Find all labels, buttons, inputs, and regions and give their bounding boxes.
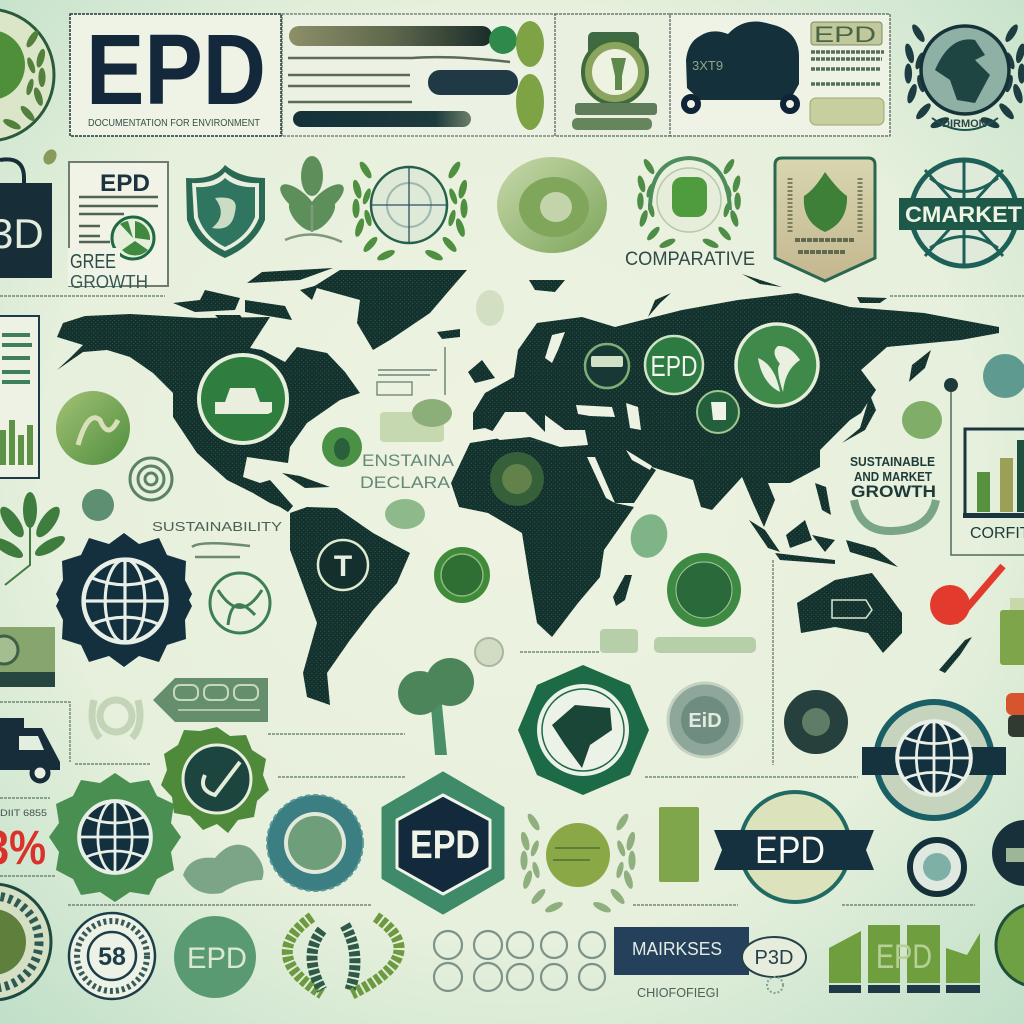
document header: EPD: [100, 170, 150, 197]
inner shield: [196, 178, 255, 247]
stripe: [0, 672, 55, 687]
map badge: europe: [585, 344, 629, 388]
shield emblem: [212, 198, 236, 229]
bar two: [428, 70, 518, 95]
chart base: [829, 985, 980, 993]
icon: small line graphic: [192, 543, 250, 557]
label chips lower map: [600, 629, 756, 653]
icon: bottle: [1000, 598, 1024, 665]
icon grid: [434, 931, 605, 991]
text: sustainable declaration: [360, 451, 455, 492]
map badge: africa: [490, 452, 544, 506]
inner: [537, 684, 629, 776]
center: [0, 909, 26, 975]
chart: green EPD steps: [829, 925, 980, 993]
badge: compass wreath: [351, 160, 469, 263]
pale box: [380, 412, 444, 442]
bottom right circle: [996, 903, 1024, 987]
icon: pin: [944, 378, 1024, 555]
center: [923, 853, 951, 881]
map: seas cutouts: [490, 332, 800, 503]
map: iceland: [437, 329, 460, 339]
truck label: 3XT9: [692, 58, 723, 73]
label: [591, 356, 623, 367]
icon: small dots: [767, 977, 783, 993]
chart label: EPD: [876, 938, 932, 976]
badge: teal gear: [267, 795, 363, 891]
handle: [0, 159, 24, 200]
icon: green blob: [183, 845, 264, 894]
inner: [284, 812, 346, 874]
inner: [676, 562, 732, 618]
icon: red check: [930, 566, 1003, 625]
map badge: australia: [832, 600, 872, 618]
text: comparative: COMPARATIVE: [625, 249, 755, 270]
tick: [955, 566, 1003, 622]
inner ring: [88, 932, 136, 980]
globe: [921, 26, 1009, 114]
check: [203, 762, 240, 795]
wreath ring: [0, 896, 39, 988]
world map: [57, 268, 999, 705]
chart lines: [2, 335, 32, 382]
wreath: [0, 29, 47, 132]
badge: tan shield: [775, 158, 875, 281]
seal: grey ring: [668, 683, 742, 757]
text: caption: CHIOFOFIEGI: [637, 985, 719, 1000]
badge: comparative wreath: [636, 158, 742, 250]
center: [1006, 848, 1024, 862]
inner: [502, 464, 532, 494]
badge: globe banner: [862, 702, 1006, 818]
lines: [553, 848, 600, 860]
label arc: [932, 118, 998, 130]
ring: [542, 689, 624, 771]
icon: double wreath: [287, 917, 399, 994]
icon: shield: [186, 165, 265, 258]
icon: small seal: [475, 638, 503, 666]
tree: [398, 658, 474, 755]
panel: left bar chart: [0, 316, 39, 478]
label tag top: EPD: [814, 22, 876, 47]
map: japan: [842, 395, 876, 443]
icon: pie: [112, 217, 154, 259]
side lines: [790, 178, 860, 232]
wheel: [32, 765, 48, 781]
center: [546, 823, 610, 887]
icon: leaf plant: [0, 492, 68, 585]
map badge: indian ocean: [667, 553, 741, 627]
bars: [977, 440, 1024, 512]
label: [377, 382, 412, 395]
silhouette: [334, 438, 350, 460]
icon: leaf badge: [489, 26, 517, 54]
banner: [714, 830, 874, 870]
map: [552, 705, 612, 768]
shield ring: [192, 172, 259, 251]
tag bottom: [1008, 715, 1024, 737]
icon: seed: [41, 147, 59, 167]
text ring: [77, 921, 147, 991]
icon: truck: [0, 718, 60, 781]
banner text: CMARKET: [905, 202, 1023, 227]
icon: sustainable growth text: [850, 454, 936, 531]
map: madagascar: [613, 575, 632, 606]
icon: wheels: [684, 97, 797, 111]
map badge: flower: [736, 324, 818, 406]
window: [19, 736, 44, 750]
icon: small teal blob: [82, 489, 114, 521]
icon: pale blob: [385, 499, 425, 529]
inner: [711, 402, 726, 420]
text: sustainable declaration: DECLARA: [360, 473, 451, 492]
badge: dark circle right: [992, 820, 1024, 886]
icon: dial center: [592, 49, 638, 95]
leaves: [758, 346, 800, 392]
map: philippines: [815, 483, 831, 515]
tag icons: [174, 685, 258, 700]
inner left branch: [312, 930, 322, 990]
roots: [285, 205, 342, 242]
badge: navy gear globe: [56, 533, 192, 667]
line: [951, 392, 1024, 555]
text: sustainability: SUSTAINABILITY: [152, 519, 282, 534]
icon: sustainable growth text: SUSTAINABLE: [850, 454, 935, 469]
icon: bar top: [575, 103, 657, 115]
badge: top left corner: [0, 9, 54, 141]
map: new zealand: [939, 637, 972, 673]
caption above percent: DIIT 6855: [0, 808, 47, 818]
icon: pale plant: [92, 700, 140, 738]
label tag bottom: [810, 98, 884, 125]
swirl: [78, 418, 118, 445]
seal: stamp: [69, 913, 155, 999]
text lines: [811, 52, 884, 84]
icon: ship: [215, 388, 272, 414]
subtitle: DOCUMENTATION FOR ENVIRONMENT: [88, 118, 260, 129]
map badge: EPD: [645, 336, 703, 394]
icon: dial: [583, 40, 647, 104]
stamp text: 58: [98, 943, 126, 971]
map: kamchatka: [909, 350, 931, 382]
title: EPD: [86, 14, 266, 126]
badge: EPD hexagon: [383, 773, 503, 913]
banner text: EPD: [755, 830, 825, 872]
map badge: small green: [697, 391, 739, 433]
globe: [84, 560, 166, 642]
badge: top right globe wreath: [903, 23, 1024, 130]
globe lines: [925, 160, 1003, 266]
map: caribbean: [282, 473, 330, 488]
canopy: [398, 658, 474, 715]
panel: truck: [670, 14, 890, 136]
badge: dark ring: [910, 840, 964, 894]
map: arctic islands: [173, 268, 333, 328]
banner: markses: [614, 927, 749, 975]
globe: [79, 801, 151, 873]
badge: EPD banner circle: [714, 792, 874, 902]
tag: arrow: [153, 678, 268, 722]
baseline: [963, 513, 1024, 518]
icon: green ring: [210, 573, 270, 633]
seal: dark: [784, 690, 848, 754]
icon: key top: [588, 32, 639, 56]
bottom left seal: [0, 884, 51, 1000]
seal: P3D: [742, 937, 806, 977]
cap: [1010, 598, 1024, 610]
icon: olive rectangle: [659, 807, 699, 882]
icon: shopping bag: [0, 159, 52, 278]
icon: olive leaves: [516, 21, 544, 130]
panel: process bars: [282, 14, 555, 136]
badge text: EPD: [650, 351, 698, 383]
badge: olive wreath: [519, 812, 637, 915]
icon: sustainable growth text: GROWTH: [851, 482, 936, 501]
panel: left landscape: [0, 627, 55, 687]
panel: key icon: [555, 14, 670, 136]
ring: [854, 500, 936, 531]
label: DIRMON: [942, 118, 987, 130]
outer right branch: [352, 917, 399, 994]
map badge: south america: [318, 540, 368, 590]
map: svalbard and arctic russia: [529, 274, 887, 317]
map: australia: [797, 573, 902, 653]
seal text: P3D: [755, 947, 793, 969]
text: sustainable declaration: ENSTAINA: [362, 451, 455, 470]
map badge: atlantic: [322, 427, 362, 467]
label tag top: [811, 22, 882, 47]
globe: [897, 721, 971, 795]
text: green growth: [68, 248, 148, 292]
badge: green gear globe: [49, 773, 181, 902]
stem: [5, 520, 30, 585]
center icon: [672, 177, 707, 217]
document lines: [79, 197, 158, 242]
word: growth: GROWTH: [70, 272, 148, 292]
arc: [650, 158, 730, 210]
compass lines: [371, 167, 447, 243]
map badge: north america: [199, 355, 287, 443]
bar three: [293, 111, 471, 127]
inner ring: [183, 745, 251, 813]
emblem: [540, 192, 572, 222]
bar one: [289, 26, 492, 46]
icon: T: [334, 550, 352, 583]
compass rings: [387, 183, 431, 227]
word: green: GREE: [70, 251, 116, 273]
leaf: [804, 172, 847, 232]
center: [657, 168, 721, 232]
banner: [862, 747, 1006, 775]
badge: map blob: [518, 665, 649, 795]
icon: sustainable growth text: AND MARKET: [854, 469, 932, 484]
badge text: EPD: [410, 823, 480, 867]
badge: green gear: [161, 727, 269, 833]
icon: truck body: [686, 22, 799, 100]
tag lines: [178, 709, 260, 711]
panel: EPD document: [69, 162, 168, 286]
ring: [0, 636, 18, 664]
icon: teal circle: [983, 354, 1024, 398]
icon: olive hex: [902, 401, 942, 439]
banner: [899, 198, 1024, 230]
map: south america: [290, 507, 410, 705]
map: africa and arabia: [451, 437, 656, 637]
panel: EPD title: [70, 14, 281, 136]
chart: right bars: [963, 429, 1024, 542]
icon: red tag: [1006, 693, 1024, 737]
badge: EPD green: [174, 916, 256, 998]
map: eurasia: [473, 293, 999, 527]
map badge: pale heart: [626, 510, 672, 562]
icon: plant: [275, 156, 349, 242]
icon: key shape: [611, 58, 626, 90]
inner: [681, 696, 729, 744]
icon: pale caption block: [377, 347, 452, 442]
banner text: MAIRKSES: [632, 939, 722, 959]
inner: [441, 554, 483, 596]
badge: olive circle: [497, 157, 607, 253]
center: [0, 30, 25, 100]
divider rules: [0, 296, 1024, 905]
octagon: [397, 795, 490, 894]
compass: [371, 167, 447, 243]
icon: bar bottom: [572, 118, 652, 130]
badge text: EPD: [187, 942, 247, 975]
pale eye: [412, 399, 452, 427]
icon: swirl ring: [130, 458, 172, 500]
map: indonesia: [749, 520, 898, 567]
map: uk: [468, 360, 495, 383]
center: [288, 816, 342, 870]
center: [802, 708, 830, 736]
inner right branch: [345, 925, 355, 990]
icon: pale plant upper: [476, 290, 504, 326]
inner: [519, 177, 589, 237]
text lines: [288, 57, 510, 102]
map: greenland: [313, 270, 467, 350]
map badge: green left: [434, 547, 490, 603]
bars: [3, 420, 30, 465]
badge: market: [899, 160, 1024, 266]
shield caption: [795, 240, 855, 252]
map: north america: [57, 314, 360, 512]
seal text: EiD: [688, 710, 722, 732]
land: [935, 39, 990, 103]
icon: olive circle: [56, 391, 130, 465]
